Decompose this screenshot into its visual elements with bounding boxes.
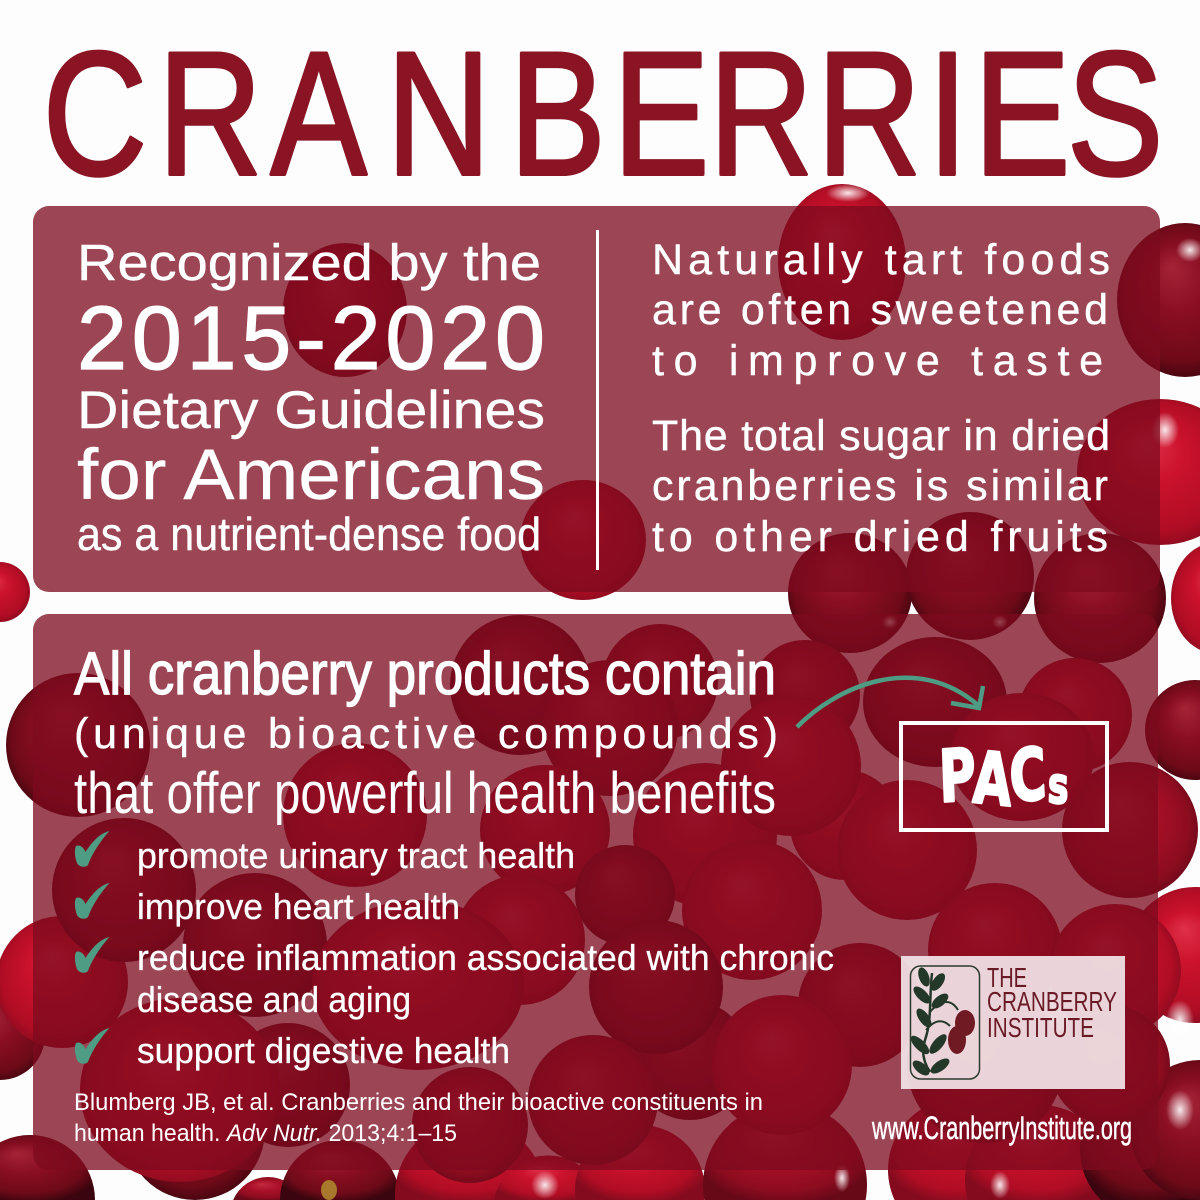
icon: cranberry sprig <box>908 966 958 1078</box>
text block: recognized by the guidelines: Dietary Guidelines <box>77 381 545 440</box>
icon: check mark <box>75 883 110 919</box>
logo: the cranberry institute <box>901 956 1125 1089</box>
logo: the cranberry institute: CRANBERRY <box>987 986 1117 1017</box>
icon: check mark <box>75 831 110 867</box>
text block: naturally tart foods: Naturally tart foods <box>652 236 1110 284</box>
heading: all cranberry products <box>74 640 778 826</box>
logo: the cranberry institute: INSTITUTE <box>987 1012 1094 1043</box>
text block: recognized by the guidelines: for Americans <box>77 436 545 515</box>
icon: check mark <box>75 937 110 973</box>
heading: all cranberry products: All cranberry products contain <box>74 640 776 707</box>
benefits list: promote urinary tract health <box>137 835 575 876</box>
text block: total sugar <box>652 412 1110 561</box>
citation <box>74 1089 763 1147</box>
PACs box: PACs <box>936 733 1070 822</box>
PACs box <box>901 723 1107 830</box>
text block: recognized by the guidelines: as a nutrient-dense food <box>77 508 541 560</box>
text block: recognized by the guidelines: 2015-2020 <box>77 289 545 389</box>
benefits list <box>75 831 834 1071</box>
text block: naturally tart foods <box>652 236 1110 385</box>
citation: Blumberg JB, et al. Cranberries and their bioactive constituents in <box>74 1089 763 1116</box>
benefits list: reduce inflammation associated with chronic <box>137 937 834 978</box>
text block: naturally tart foods: to improve taste <box>652 337 1103 385</box>
text block: naturally tart foods: are often sweetened <box>652 286 1108 334</box>
text block: total sugar: to other dried fruits <box>652 513 1108 561</box>
icon: check mark <box>75 1028 110 1064</box>
heading: all cranberry products: (unique bioactive compounds) <box>74 710 778 758</box>
benefits list: disease and aging <box>137 979 411 1020</box>
benefits list: support digestive health <box>137 1030 510 1071</box>
heading: all cranberry products: that offer powerful health benefits <box>74 761 776 826</box>
title: CRANBERRIES <box>43 16 1163 213</box>
text block: recognized by the guidelines: Recognized by the <box>77 234 541 291</box>
arrow <box>797 678 983 727</box>
logo: the cranberry institute: THE <box>987 962 1027 993</box>
benefits list: improve heart health <box>137 886 460 927</box>
panel: dietary guidelines <box>33 206 1160 592</box>
citation: human health. Adv Nutr. 2013;4:1–15 <box>74 1120 457 1147</box>
panel: health benefits <box>33 614 1158 1170</box>
text block: recognized by the guidelines <box>77 234 545 560</box>
text block: total sugar: cranberries is similar <box>652 462 1108 510</box>
text block: total sugar: The total sugar in dried <box>652 412 1110 460</box>
